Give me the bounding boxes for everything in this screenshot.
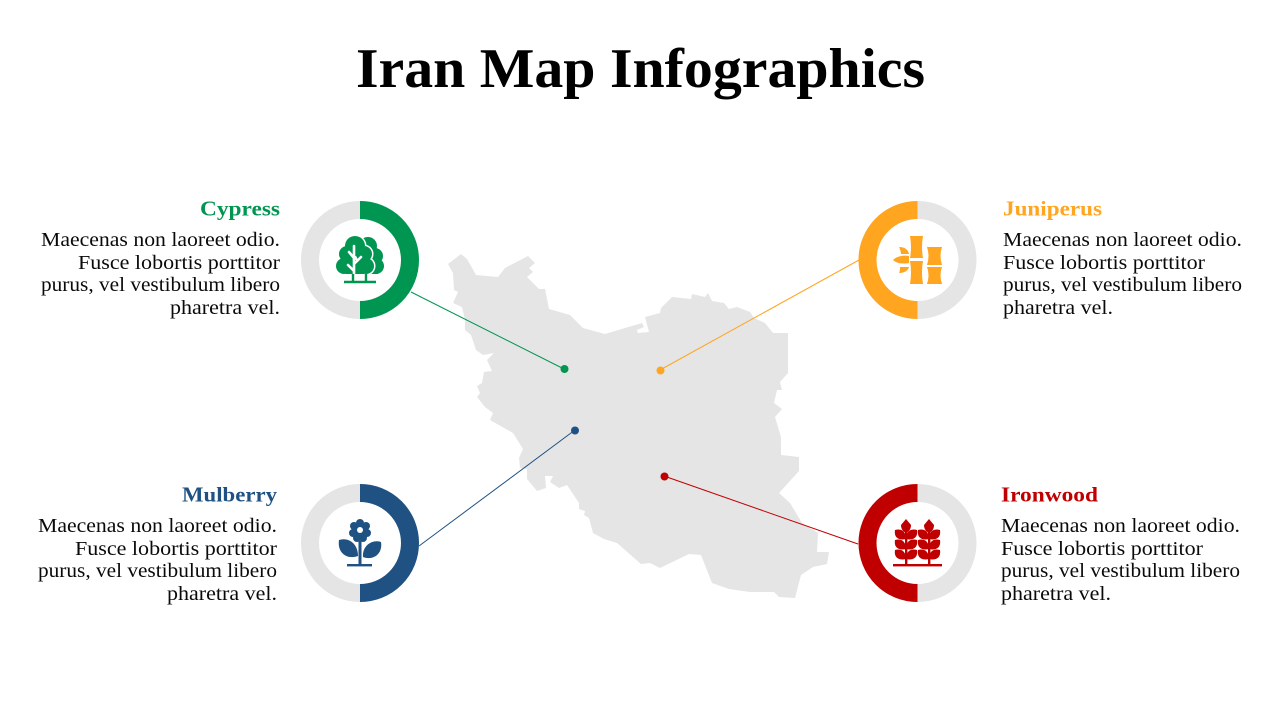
connector line and dot: Ironwood	[660, 472, 858, 544]
icon: trees	[336, 236, 384, 282]
donut: Ironwood	[868, 493, 968, 593]
title: Iran Map Infographics	[356, 38, 925, 100]
panel: Ironwood	[660, 472, 1240, 605]
text block: Juniperus description: Fusce lobortis porttitor	[1003, 252, 1205, 274]
heading: Juniperus: Juniperus	[1003, 196, 1102, 220]
text block: Mulberry description: purus, vel vestibulum libero	[38, 560, 277, 582]
text block: Juniperus description: pharetra vel.	[1003, 297, 1113, 319]
text block: Juniperus description: Maecenas non laoreet odio.	[1003, 229, 1242, 251]
text block: Ironwood description: Maecenas non laoreet odio.	[1001, 515, 1240, 537]
heading: Mulberry: Mulberry	[182, 482, 278, 506]
text block: Cypress description	[41, 229, 280, 319]
text block: Mulberry description: pharetra vel.	[167, 583, 277, 605]
panel: Cypress	[41, 196, 568, 373]
text block: Mulberry description	[38, 515, 277, 605]
text block: Mulberry description: Fusce lobortis porttitor	[75, 538, 277, 560]
text block: Ironwood description	[1001, 515, 1240, 605]
text block: Ironwood description: purus, vel vestibulum libero	[1001, 560, 1240, 582]
text block: Cypress description: Fusce lobortis porttitor	[78, 252, 280, 274]
icon: bamboo	[893, 236, 942, 284]
text block: Cypress description: pharetra vel.	[170, 297, 280, 319]
text block: Cypress description: purus, vel vestibulum libero	[41, 274, 280, 296]
text block: Juniperus description: purus, vel vestibulum libero	[1003, 274, 1242, 296]
heading: Ironwood: Ironwood	[1001, 482, 1098, 506]
connector line and dot: Cypress	[411, 292, 568, 373]
icon: flower	[339, 519, 381, 566]
icon: wheat	[893, 519, 942, 566]
text block: Juniperus description	[1003, 229, 1242, 319]
connector line and dot: Juniperus	[656, 260, 859, 374]
donut: Cypress	[310, 210, 410, 310]
text block: Ironwood description: pharetra vel.	[1001, 583, 1111, 605]
map: Iran silhouette	[448, 254, 829, 598]
panel: Mulberry	[38, 426, 579, 605]
panel: Juniperus	[656, 196, 1242, 374]
text block: Cypress description: Maecenas non laoreet odio.	[41, 229, 280, 251]
text block: Mulberry description: Maecenas non laoreet odio.	[38, 515, 277, 537]
text block: Ironwood description: Fusce lobortis porttitor	[1001, 538, 1203, 560]
connector line and dot: Mulberry	[419, 426, 579, 546]
heading: Cypress: Cypress	[200, 196, 280, 220]
donut: Mulberry	[310, 493, 410, 593]
donut: Juniperus	[868, 210, 968, 310]
